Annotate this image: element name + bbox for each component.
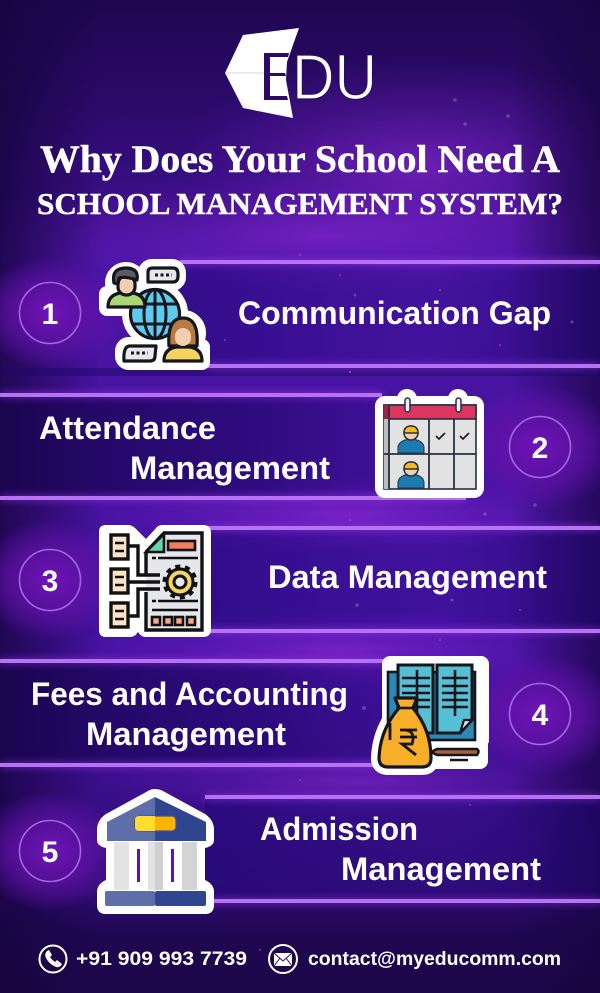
number badge 5: [20, 820, 80, 882]
heading: Attendance Management: [39, 410, 330, 486]
number badge 2: 2: [532, 432, 548, 465]
heading: Attendance Management: Attendance: [39, 410, 216, 446]
number badge 3: [20, 550, 80, 610]
heading: Data Management: Data Management: [268, 559, 547, 595]
title: SCHOOL MANAGEMENT SYSTEM?: [37, 186, 563, 221]
badge glows: [0, 257, 600, 911]
heading: Fees and Accounting Management: [31, 676, 348, 752]
footer: phone: [40, 946, 247, 972]
icon: fees and accounting: [379, 664, 481, 767]
heading: Admission Management: Management: [341, 851, 541, 887]
footer: email: [269, 945, 561, 973]
glowing divider lines: [0, 260, 600, 903]
heading: Communication Gap: Communication Gap: [238, 295, 551, 331]
logo: EDU: DU: [292, 41, 377, 113]
number badge 3: 3: [42, 565, 58, 598]
number badge 5: 5: [42, 836, 58, 869]
number badge 4: [510, 684, 570, 744]
icon: attendance calendar: [375, 389, 484, 498]
title: [37, 138, 563, 221]
footer: phone: +91 909 993 7739: [76, 949, 247, 970]
icon: admission building: [97, 789, 214, 914]
heading: Fees and Accounting Management: Fees and Accounting: [31, 676, 348, 712]
number badge 2: [510, 416, 570, 478]
footer: email: contact@myeducomm.com: [308, 949, 561, 970]
icon: communication: [107, 267, 202, 362]
title: Why Does Your School Need A: [40, 138, 560, 181]
heading: Admission Management: [260, 811, 541, 887]
logo: EDU: [225, 28, 377, 118]
background specks: [224, 98, 574, 951]
number badge 1: 1: [42, 298, 58, 331]
number badge 4: 4: [532, 699, 549, 732]
heading: Admission Management: Admission: [260, 811, 418, 847]
number badge 1: [20, 282, 80, 344]
heading: Fees and Accounting Management: Management: [86, 716, 286, 752]
heading: Attendance Management: Management: [130, 450, 330, 486]
icon: data management: [99, 525, 211, 637]
row bands: [0, 264, 600, 899]
